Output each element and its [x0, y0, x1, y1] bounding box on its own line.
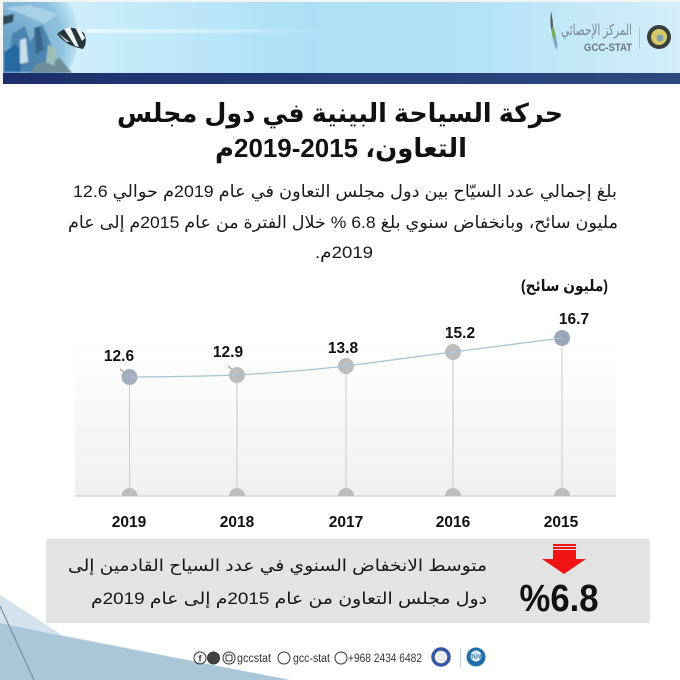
intro paragraph: مليون سائح، وبانخفاض سنوي بلغ 6.8 % خلال الفترة من عام 2015م إلى عام	[68, 213, 618, 233]
social icons	[194, 652, 347, 664]
logo arabic name: المركز الإحصائي	[561, 22, 632, 40]
data values: 12.9	[213, 344, 243, 361]
data values: 12.6	[104, 348, 134, 365]
header banner	[0, 0, 680, 84]
contact text: gccstat	[237, 653, 272, 665]
logo subtitle: GCC-STAT	[584, 42, 632, 54]
stems	[130, 338, 562, 496]
callout text: متوسط الانخفاض السنوي في عدد السياح القادمين إلى	[68, 557, 487, 576]
baseline dots	[122, 488, 570, 496]
logo ribbon	[550, 11, 557, 50]
icon: red down arrow	[542, 544, 586, 574]
logo: GCC-STAT	[550, 11, 671, 54]
title: حركة السياحة البينية في دول مجلس	[117, 98, 563, 129]
icon: TUV badge	[466, 648, 486, 666]
title	[117, 98, 563, 164]
icon: parachute	[57, 27, 86, 49]
intro paragraph	[68, 182, 618, 262]
contact text: +968 2434 6482	[348, 653, 422, 665]
data values	[104, 311, 589, 365]
year axis labels	[112, 514, 579, 531]
year axis labels: 2019	[112, 514, 147, 531]
year axis labels: 2015	[544, 514, 579, 531]
icon: quality badge	[433, 649, 449, 665]
year axis labels: 2018	[220, 514, 255, 531]
big percentage: %6.8	[520, 578, 598, 620]
title: التعاون، 2015-2019م	[215, 133, 467, 164]
contact text: gcc-stat	[293, 653, 331, 665]
footer contact row	[194, 648, 486, 667]
year axis labels: 2017	[329, 514, 363, 531]
contact text	[237, 653, 422, 665]
intro paragraph: بلغ إجمالي عدد السيّاح بين دول مجلس التعاون في عام 2019م حوالي 12.6	[73, 182, 617, 202]
callout text	[68, 557, 487, 609]
data values: 16.7	[559, 311, 589, 328]
callout panel	[46, 539, 650, 623]
data values: 13.8	[328, 340, 358, 357]
globe collage image	[3, 2, 77, 73]
data values: 15.2	[445, 325, 475, 342]
footer background shapes	[0, 595, 290, 680]
data points	[122, 330, 570, 385]
logo emblem	[647, 25, 671, 49]
year axis labels: 2016	[436, 514, 471, 531]
callout text: دول مجلس التعاون من عام 2015م إلى عام 2019م	[91, 590, 487, 609]
icon: TUV badge: TÜV	[470, 654, 482, 660]
footer contact row: f	[198, 654, 202, 664]
unit label: (مليون سائح)	[521, 278, 608, 295]
intro paragraph: 2019م.	[315, 243, 373, 262]
line chart	[75, 311, 616, 531]
trend line	[130, 338, 562, 377]
leader ticks	[120, 366, 235, 373]
